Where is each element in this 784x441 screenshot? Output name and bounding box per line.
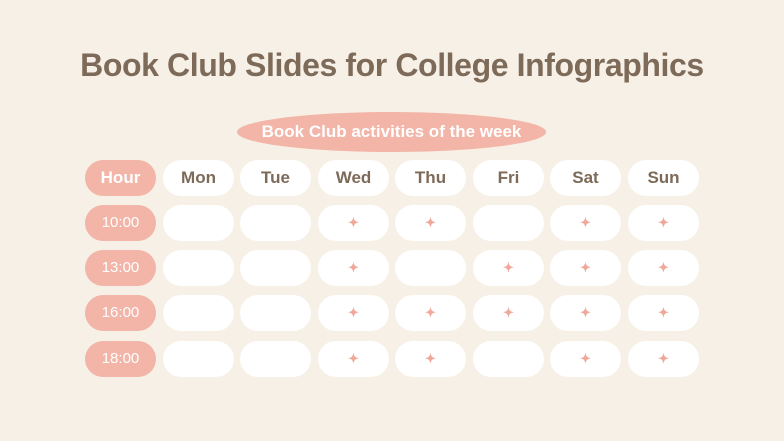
schedule table: Sun bbox=[647, 168, 680, 187]
schedule table: 10:00 bbox=[102, 214, 139, 231]
schedule table: ✦ bbox=[580, 351, 591, 366]
schedule table: Hour bbox=[101, 168, 140, 187]
schedule table: ✦ bbox=[658, 351, 669, 366]
badge: subtitle: Book Club activities of the week bbox=[262, 122, 521, 141]
schedule table: ✦ bbox=[503, 305, 514, 320]
schedule table: Mon bbox=[181, 168, 216, 187]
schedule table: ✦ bbox=[348, 260, 359, 275]
schedule table: 16:00 bbox=[102, 304, 139, 321]
schedule table: ✦ bbox=[348, 215, 359, 230]
title: Book Club Slides for College Infographics bbox=[80, 47, 704, 83]
schedule table: Sat bbox=[572, 168, 599, 187]
schedule table: ✦ bbox=[580, 260, 591, 275]
schedule table: ✦ bbox=[580, 305, 591, 320]
schedule table: ✦ bbox=[425, 351, 436, 366]
schedule table: ✦ bbox=[425, 215, 436, 230]
schedule table: Tue bbox=[261, 168, 290, 187]
badge: subtitle bbox=[237, 112, 546, 152]
schedule table: ✦ bbox=[658, 260, 669, 275]
schedule table: Wed bbox=[336, 168, 371, 187]
schedule table: ✦ bbox=[425, 305, 436, 320]
schedule table: ✦ bbox=[580, 215, 591, 230]
schedule table: 18:00 bbox=[102, 350, 139, 367]
schedule table: ✦ bbox=[348, 305, 359, 320]
schedule table: ✦ bbox=[348, 351, 359, 366]
schedule table: Thu bbox=[415, 168, 446, 187]
schedule table: ✦ bbox=[658, 215, 669, 230]
schedule table: ✦ bbox=[658, 305, 669, 320]
schedule table: 13:00 bbox=[102, 259, 139, 276]
schedule table: ✦ bbox=[503, 260, 514, 275]
schedule table: Fri bbox=[498, 168, 519, 187]
